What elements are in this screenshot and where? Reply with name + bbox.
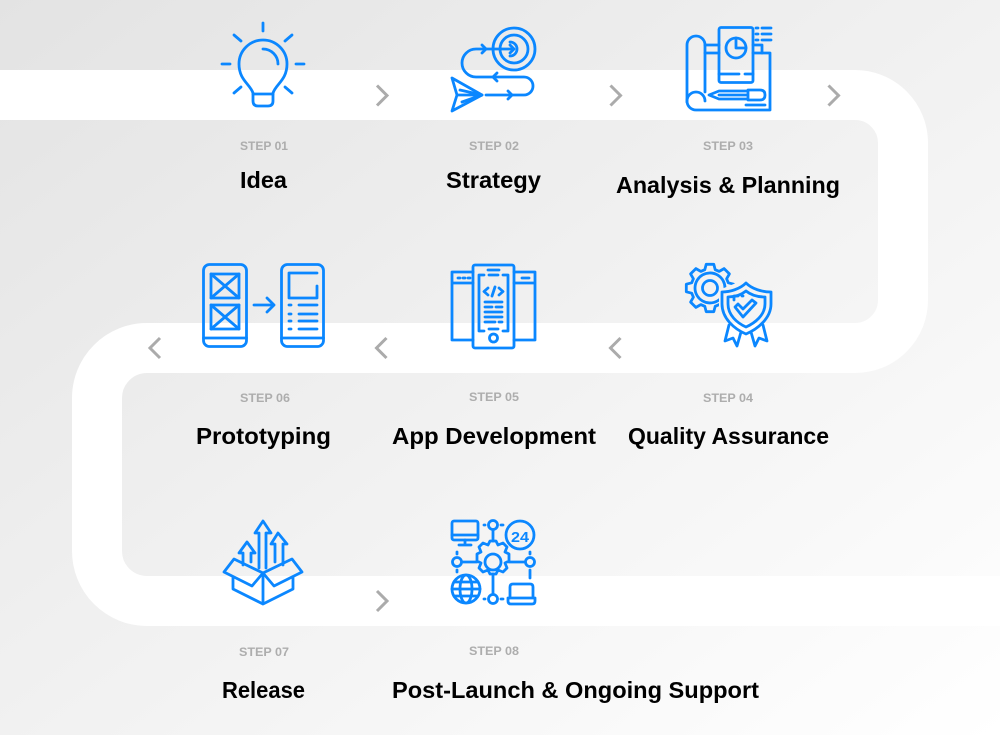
step 07 title: Release <box>222 677 305 703</box>
step 02 label: STEP 02 <box>469 139 519 153</box>
icon: open box with arrows <box>224 521 302 604</box>
icon: 24 hour support network <box>452 520 535 604</box>
icon: app development <box>452 265 535 348</box>
arrow: step 1 to 2 <box>377 86 387 106</box>
arrow: step 5 to 6 <box>376 338 386 358</box>
step 03 label: STEP 03 <box>703 139 753 153</box>
step 07 label: STEP 07 <box>239 645 289 659</box>
step 02 title: Strategy <box>446 167 541 193</box>
step 08 title: Post-Launch & Ongoing Support <box>392 677 759 703</box>
arrow: step 7 to 8 <box>377 591 387 611</box>
step 04 label: STEP 04 <box>703 391 753 405</box>
icon: 24 hour support network: 24 <box>511 529 530 546</box>
step 04 title: Quality Assurance <box>628 423 829 449</box>
icon: gear and shield <box>686 264 771 346</box>
arrow: step 2 to 3 <box>610 86 620 106</box>
step 05 title: App Development <box>392 423 596 449</box>
step 05 label: STEP 05 <box>469 390 519 404</box>
arrow: step 3 onward <box>828 86 838 106</box>
icon: target strategy <box>452 28 535 111</box>
icon: light bulb <box>222 23 304 106</box>
step 06 title: Prototyping <box>196 423 331 449</box>
icon: analysis and planning <box>687 28 771 110</box>
step 06 label: STEP 06 <box>240 391 290 405</box>
step 08 label: STEP 08 <box>469 644 519 658</box>
white winding track <box>0 95 1000 601</box>
step 01 label: STEP 01 <box>240 139 288 153</box>
arrow: step 6 onward <box>150 338 160 358</box>
arrow: step 4 to 5 <box>610 338 620 358</box>
icon: prototyping screens <box>204 264 324 346</box>
step 01 title: Idea <box>240 167 287 193</box>
step 03 title: Analysis & Planning <box>616 172 840 198</box>
